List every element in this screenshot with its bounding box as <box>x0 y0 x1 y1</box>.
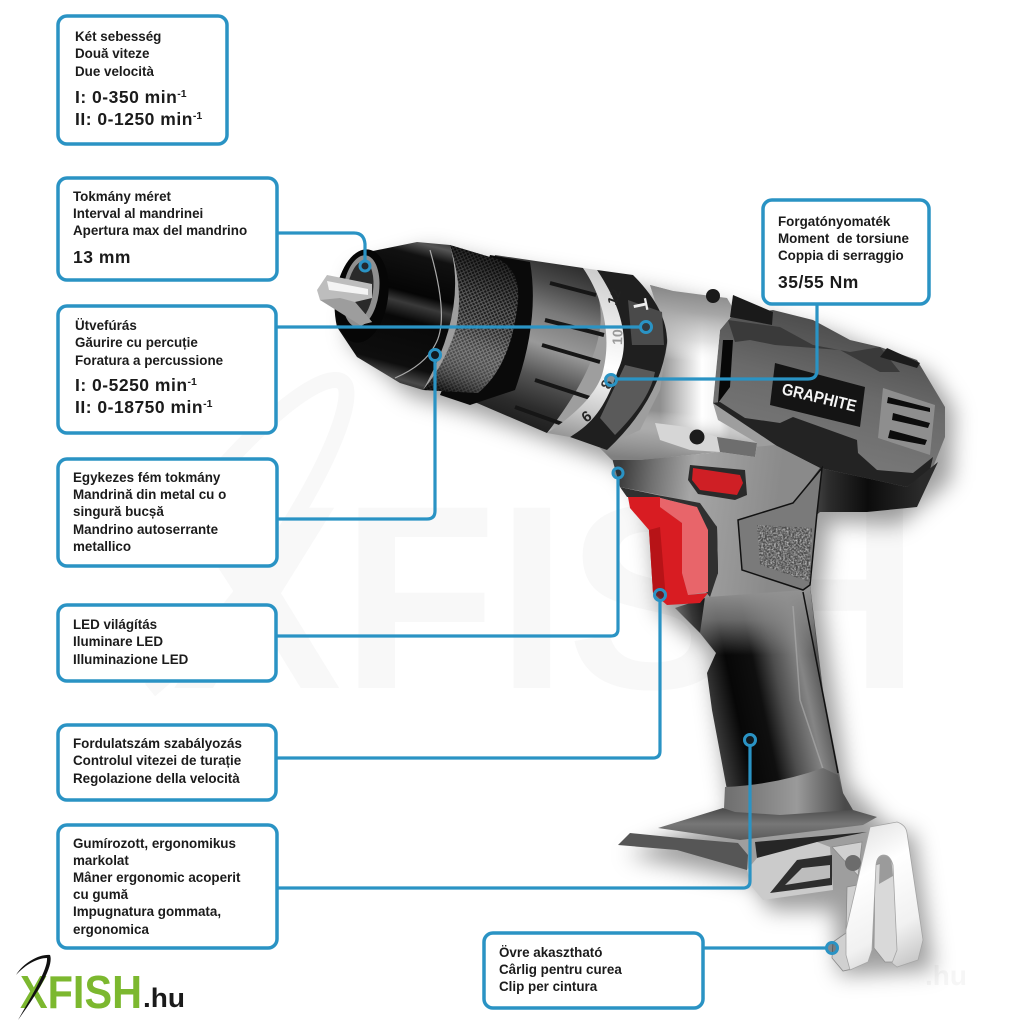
trigger guard frame <box>620 487 718 597</box>
callout: impact drilling: Ütvefúrás <box>75 318 137 333</box>
logo: XFISH.hu: XFISH <box>20 966 142 1018</box>
belt clip <box>832 822 923 971</box>
callout: LED light: LED világítás <box>73 617 157 632</box>
callout: speed control <box>58 725 276 800</box>
marker dots <box>360 261 838 954</box>
speed collar <box>470 255 601 433</box>
lower screw boss <box>655 423 757 457</box>
callout: belt clip: Cârlig pentru curea <box>499 962 622 977</box>
callout: rubber grip: Impugnatura gommata, <box>73 904 221 919</box>
base plate upper <box>658 808 877 840</box>
callout: impact drilling <box>58 306 276 433</box>
brand label <box>770 363 865 427</box>
watermark: XFISH: XFISH <box>172 451 920 744</box>
callout: impact drilling: -1 <box>203 398 213 410</box>
red trigger <box>628 497 708 605</box>
callout: two speeds: I: 0-350 min <box>75 87 177 107</box>
rear lower black zone <box>793 462 938 525</box>
chuck <box>317 242 533 405</box>
body main shell <box>713 310 945 487</box>
nose <box>330 246 394 346</box>
leader lines <box>276 233 826 948</box>
callout: torque: Coppia di serraggio <box>778 248 904 263</box>
callout: LED light <box>58 605 276 681</box>
callout: torque: 35/55 Nm <box>778 272 859 292</box>
callout: speed control: Fordulatszám szabályozás <box>73 736 242 751</box>
callout: keyless metal chuck: Mandrino autoserrante <box>73 522 218 537</box>
callout: impact drilling: Foratura a percussione <box>75 353 223 368</box>
callout: belt clip: Övre akasztható <box>499 945 602 960</box>
callout: keyless metal chuck: singură bucșă <box>73 504 164 519</box>
callout: speed control: Controlul vitezei de turație <box>73 753 241 768</box>
base dark band <box>755 832 867 858</box>
callout: rubber grip: Gumírozott, ergonomikus <box>73 836 236 851</box>
callout: impact drilling: I: 0-5250 min <box>75 375 188 395</box>
callout: chuck size: 13 mm <box>73 247 131 267</box>
callout: speed control: Regolazione della velocità <box>73 771 240 786</box>
grip inset <box>738 468 822 590</box>
top dark panel <box>728 320 900 372</box>
callout: two speeds: Két sebesség <box>75 29 161 44</box>
callout: keyless metal chuck: Egykezes fém tokmány <box>73 470 221 485</box>
red switch <box>688 465 747 500</box>
callout: chuck size: Interval al mandrinei <box>73 206 203 221</box>
drop shadow <box>349 250 954 975</box>
torque ring <box>547 268 626 437</box>
callout: belt clip: Clip per cintura <box>499 979 598 994</box>
torque ring: 12 <box>604 287 624 307</box>
logo: XFISH.hu <box>16 955 185 1020</box>
callout: impact drilling: Găurire cu percuție <box>75 335 198 350</box>
watermark: XFISH <box>150 380 967 991</box>
handle grip <box>675 490 843 793</box>
callout: two speeds <box>58 16 227 144</box>
callout: keyless metal chuck <box>58 459 277 566</box>
callout: impact drilling: -1 <box>188 376 197 388</box>
textured grip patch <box>755 523 813 583</box>
callout: belt clip <box>484 933 703 1008</box>
bit jaws <box>317 275 372 325</box>
callout: chuck size: Apertura max del mandrino <box>73 223 247 238</box>
callout: rubber grip: Mâner ergonomic acoperit <box>73 870 241 885</box>
callout: rubber grip: cu gumă <box>73 887 129 902</box>
callout: rubber grip <box>58 825 277 948</box>
callout: torque <box>763 200 929 304</box>
callout: two speeds: -1 <box>177 88 187 100</box>
silver foot <box>747 842 833 900</box>
silver gearbox housing <box>600 285 757 460</box>
torque ring: 10 <box>609 329 626 345</box>
callout: rubber grip: markolat <box>73 853 129 868</box>
watermark: XFISH: .hu <box>925 960 967 991</box>
callout: keyless metal chuck: metallico <box>73 539 131 554</box>
callout: LED light: Illuminazione LED <box>73 652 189 667</box>
callout: two speeds: II: 0-1250 min <box>75 109 193 129</box>
mid grey trigger housing <box>612 445 820 597</box>
vents <box>878 388 935 455</box>
mode selector T: T <box>628 297 652 314</box>
rear collar ring <box>570 270 667 450</box>
callout: torque: Moment de torsiune <box>778 231 909 246</box>
drill illustration <box>317 242 954 975</box>
top tab <box>730 295 773 325</box>
callout: chuck size <box>58 178 277 280</box>
callout: torque: Forgatónyomaték <box>778 214 891 229</box>
grip collar <box>724 768 853 832</box>
callout: impact drilling: II: 0-18750 min <box>75 397 203 417</box>
brand text: GRAPHITE <box>780 380 858 416</box>
callout: two speeds: Due velocità <box>75 64 154 79</box>
callout: chuck size: Tokmány méret <box>73 189 172 204</box>
callout: keyless metal chuck: Mandrină din metal cu o <box>73 487 226 502</box>
callout: two speeds: -1 <box>193 110 202 122</box>
base plate lower <box>618 833 748 870</box>
logo: XFISH.hu: .hu <box>143 983 185 1013</box>
callout: LED light: Iluminare LED <box>73 634 163 649</box>
callout: two speeds: Două viteze <box>75 46 149 61</box>
callout: rubber grip: ergonomica <box>73 922 149 937</box>
dark slit <box>718 340 733 403</box>
dark panel band <box>713 402 933 487</box>
torque ring: 8 <box>598 378 617 391</box>
torque ring: 6 <box>579 408 595 426</box>
